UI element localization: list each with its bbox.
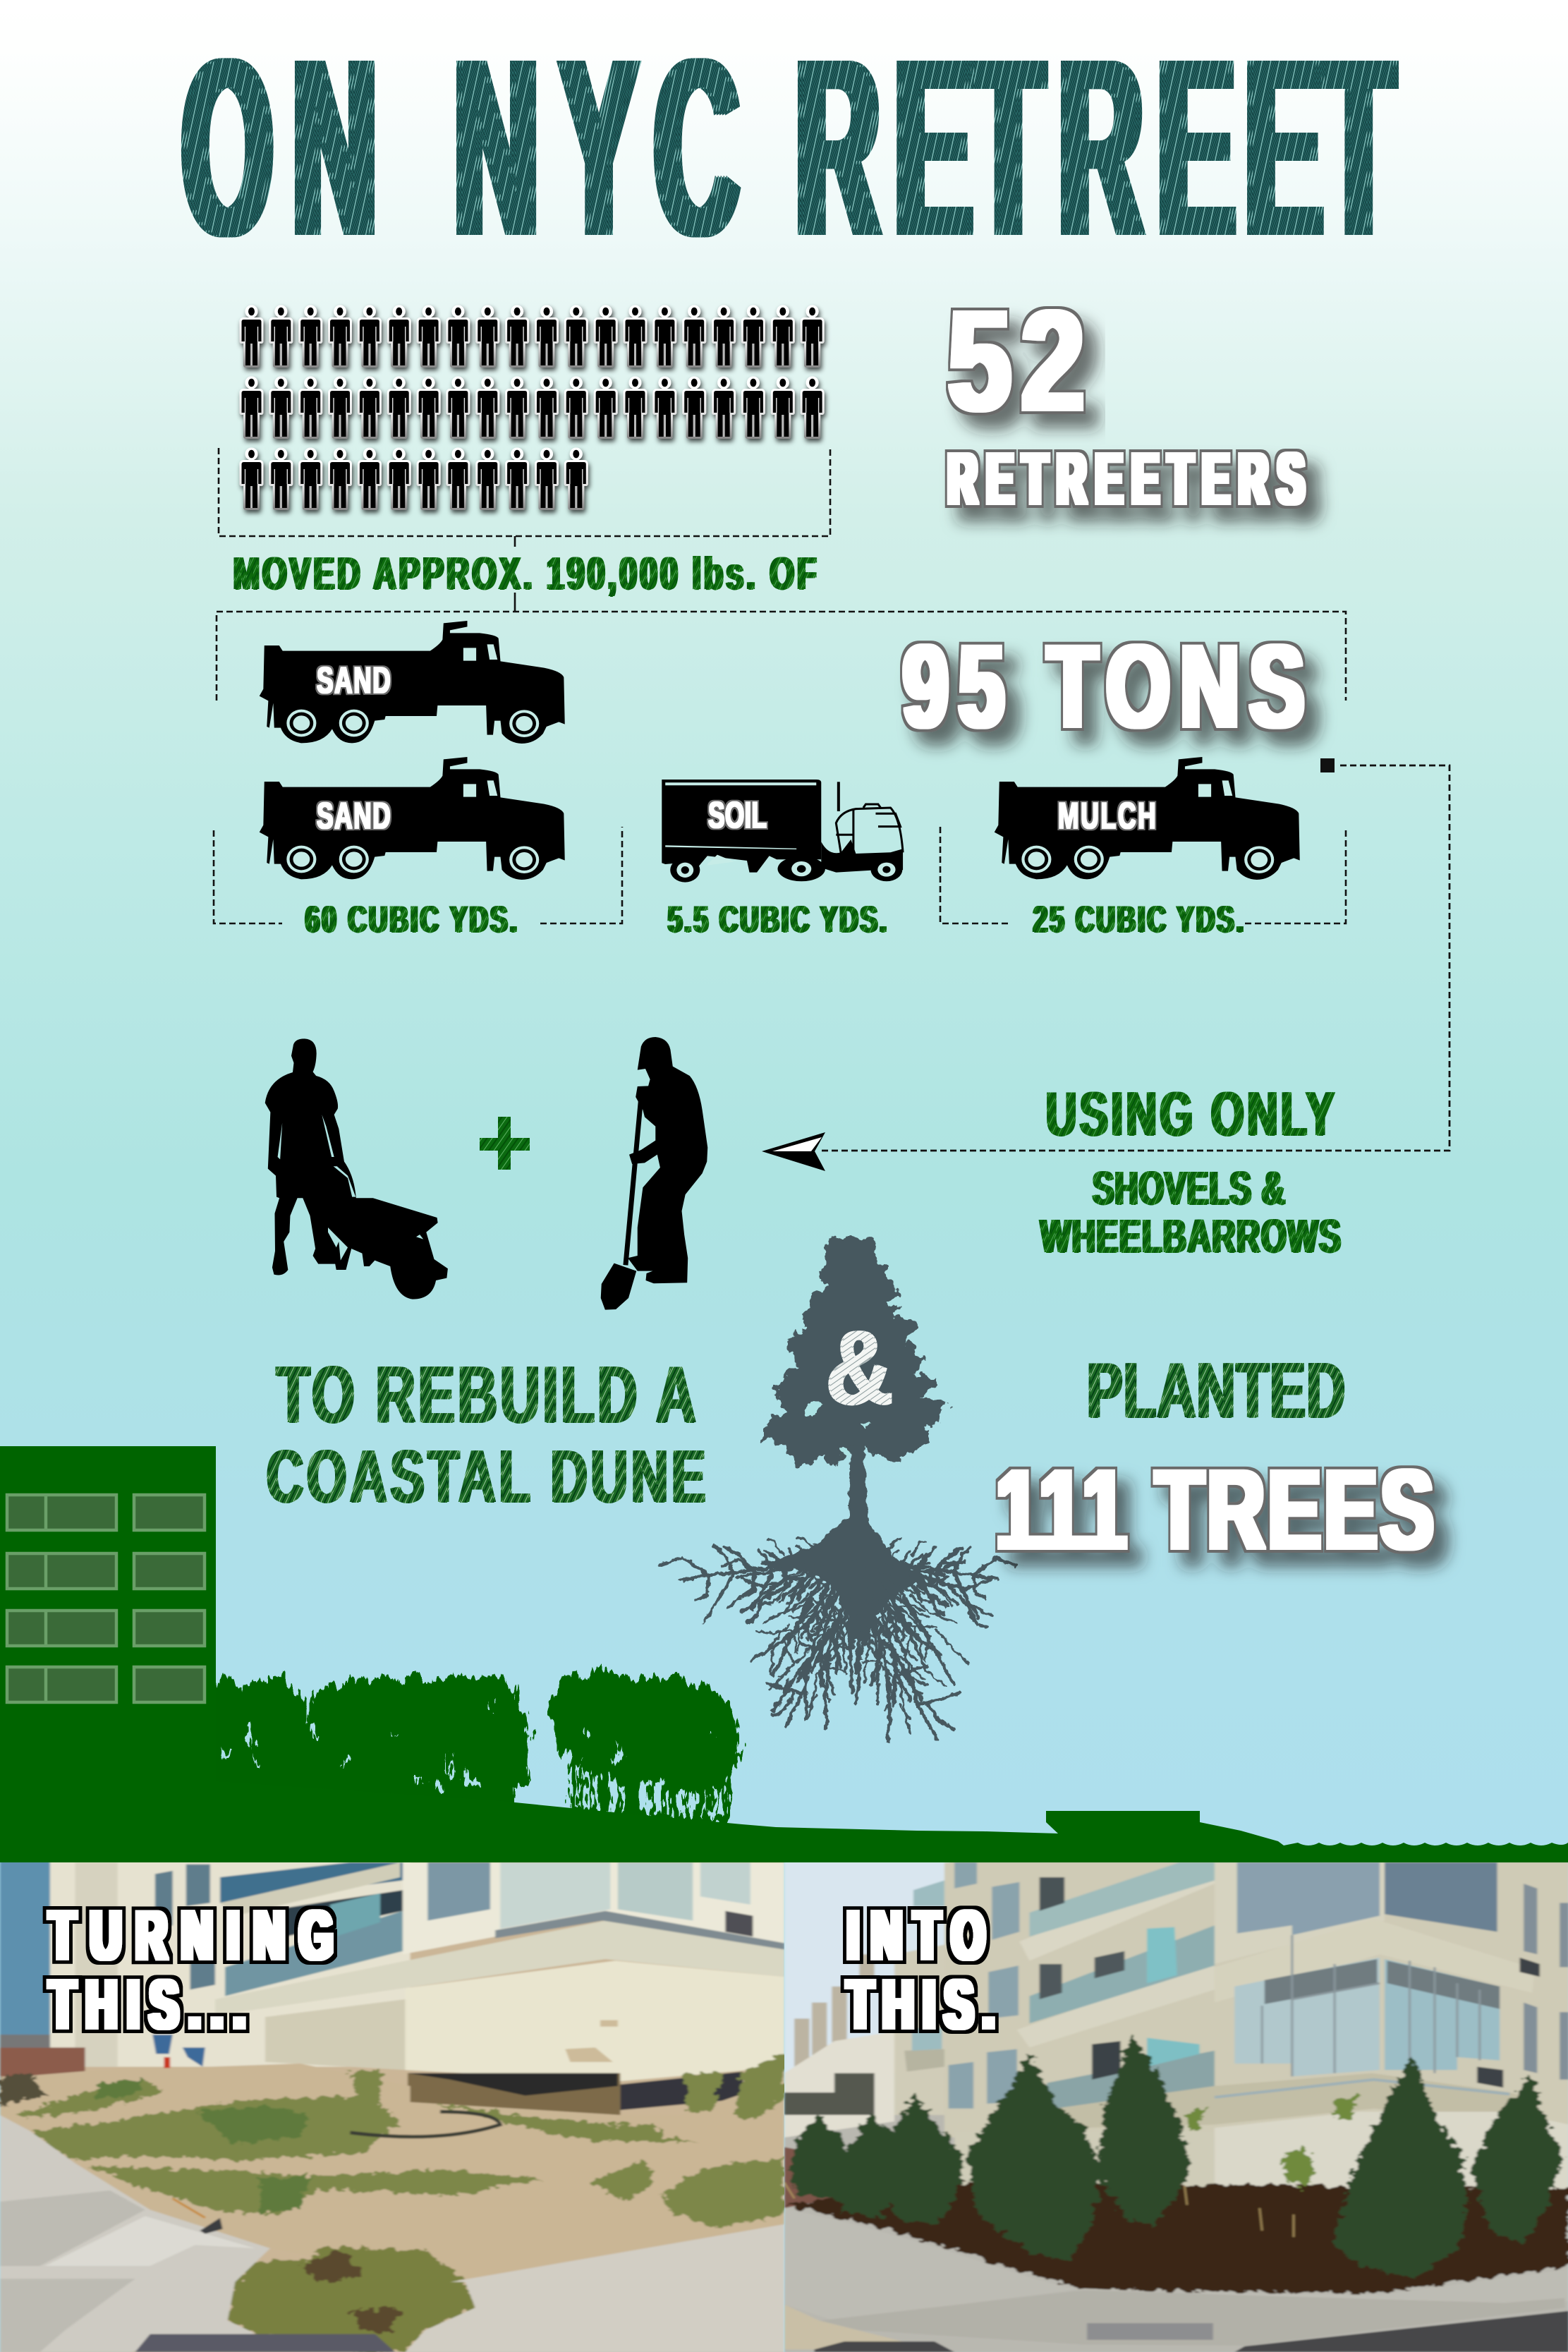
text: planted: PLANTED <box>1087 1347 1345 1435</box>
icon: man with shovel <box>601 1037 707 1310</box>
caption: turning this <box>49 1897 333 2044</box>
landscape silhouette: ground and trees <box>0 1666 1568 1862</box>
text: coastal dune: COASTAL DUNE <box>267 1435 705 1518</box>
truck: sand 2: SAND <box>317 796 391 837</box>
text: moved approx: MOVED APPROX. 190,000 lbs. OF <box>233 548 816 599</box>
photo: before, eroded dune <box>0 1861 784 2352</box>
text: to rebuild a: TO REBUILD A <box>276 1350 695 1440</box>
stat: 95 tons: 95 TONS <box>903 622 1304 752</box>
label: 5.5 cubic yds: 5.5 CUBIC YDS. <box>668 898 887 940</box>
text: using only: USING ONLY <box>1046 1079 1335 1148</box>
truck: mulch: MULCH <box>1058 796 1156 837</box>
dashed brackets <box>214 448 1346 923</box>
photo: after, planted trees and mulch <box>784 1861 1568 2352</box>
stat: 52: 52 <box>948 281 1085 440</box>
truck: soil <box>662 780 903 883</box>
truck: sand 2 <box>260 757 565 880</box>
caption: into this: THIS. <box>847 1966 995 2044</box>
label: 60 cubic yds: 60 CUBIC YDS. <box>305 898 517 940</box>
truck: sand 1: SAND <box>317 660 391 701</box>
label: 25 cubic yds: 25 CUBIC YDS. <box>1033 898 1244 940</box>
icon: plus sign <box>480 1117 530 1170</box>
truck: sand 1 <box>260 621 565 744</box>
stat label: retreeters: RETREETERS <box>948 438 1304 519</box>
truck: mulch <box>995 757 1300 880</box>
pictogram: 52 retreeters <box>241 305 822 508</box>
caption: into this <box>847 1897 995 2044</box>
caption: turning this: THIS... <box>49 1966 245 2044</box>
caption: into this: INTO <box>847 1897 985 1975</box>
truck: soil: SOIL <box>708 795 767 836</box>
text: wheelbarrows: WHEELBARROWS <box>1040 1210 1341 1263</box>
stat: 111 trees: 111 TREES <box>996 1447 1433 1573</box>
icon: tree with roots: & <box>826 1308 893 1426</box>
text: shovels and: SHOVELS & <box>1093 1162 1285 1215</box>
caption: turning this: TURNING <box>49 1897 333 1975</box>
building silhouette <box>0 1446 216 1862</box>
arrow: dashed connector to workers <box>762 758 1450 1171</box>
icon: man with wheelbarrow <box>265 1038 448 1299</box>
title: ON NYC RETREET <box>182 6 1394 289</box>
icon: tree with roots <box>659 1237 1014 1742</box>
